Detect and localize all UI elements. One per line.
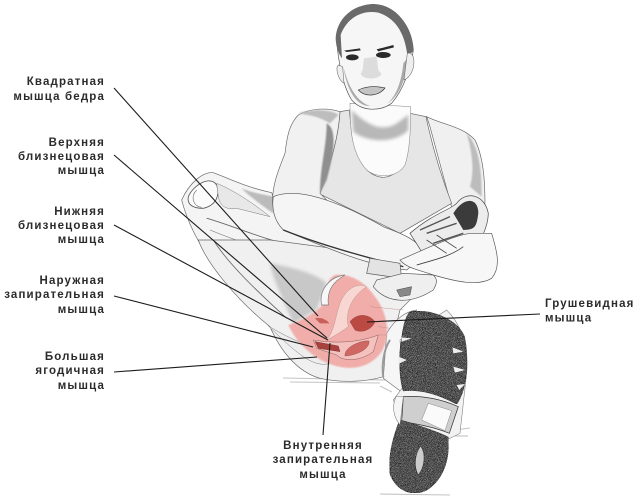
nose [361, 57, 382, 78]
label: inferior gemellus: мышца [58, 234, 105, 246]
gemellus and obturator [315, 342, 340, 352]
label: gluteus maximus: мышца [58, 380, 105, 392]
raised foot [410, 196, 488, 270]
pink glow [288, 275, 387, 368]
heel sole [390, 420, 448, 493]
torso and head [273, 4, 488, 270]
ground shadows [283, 378, 470, 495]
figure: seated athlete [182, 4, 497, 495]
label: gluteus maximus: ягодичная [35, 365, 105, 377]
quadratus [315, 318, 329, 323]
piriformis [350, 315, 375, 331]
label: quadratus femoris: мышца бедра [13, 91, 105, 103]
brows and eyes [344, 45, 394, 60]
ears [337, 65, 344, 83]
hand and arm on shin [367, 233, 497, 300]
mouth [358, 87, 385, 95]
label: inferior gemellus: близнецовая [18, 220, 105, 232]
label: inferior gemellus: Нижняя [54, 206, 105, 218]
right arm behind [427, 117, 485, 213]
neck and chest [350, 103, 411, 176]
label: superior gemellus: близнецовая [18, 151, 105, 163]
label: superior gemellus: Верхняя [49, 137, 105, 149]
forefoot sole [400, 311, 467, 404]
sole notches [398, 337, 465, 390]
upper arm [273, 109, 340, 227]
tendons [370, 307, 403, 335]
hip, buttock and supporting leg [198, 240, 417, 393]
shoe sole [390, 310, 467, 493]
label: quadratus femoris: Квадратная [27, 76, 105, 88]
leader lines [114, 88, 540, 435]
label: obturator externus: Наружная [39, 275, 105, 287]
label: superior gemellus: мышца [58, 165, 105, 177]
raised thigh and knee [182, 173, 400, 300]
label: obturator externus: мышца [58, 304, 105, 316]
inner obturator belly [345, 341, 369, 356]
label: obturator internus: Внутренняя [283, 440, 363, 452]
label: obturator internus: мышца [299, 469, 347, 481]
arch of shoe [402, 396, 458, 433]
head [337, 4, 413, 109]
label: obturator internus: запирательная [273, 454, 373, 466]
label: gluteus maximus: Большая [45, 351, 105, 363]
pelvis bone [313, 275, 378, 360]
label: obturator externus: запирательная [4, 289, 105, 301]
highlighted muscles [288, 275, 403, 368]
forearm [273, 193, 427, 270]
label: piriformis: мышца [545, 312, 592, 324]
label: piriformis: Грушевидная [545, 298, 634, 310]
hair [336, 4, 413, 58]
tank top [318, 110, 452, 233]
